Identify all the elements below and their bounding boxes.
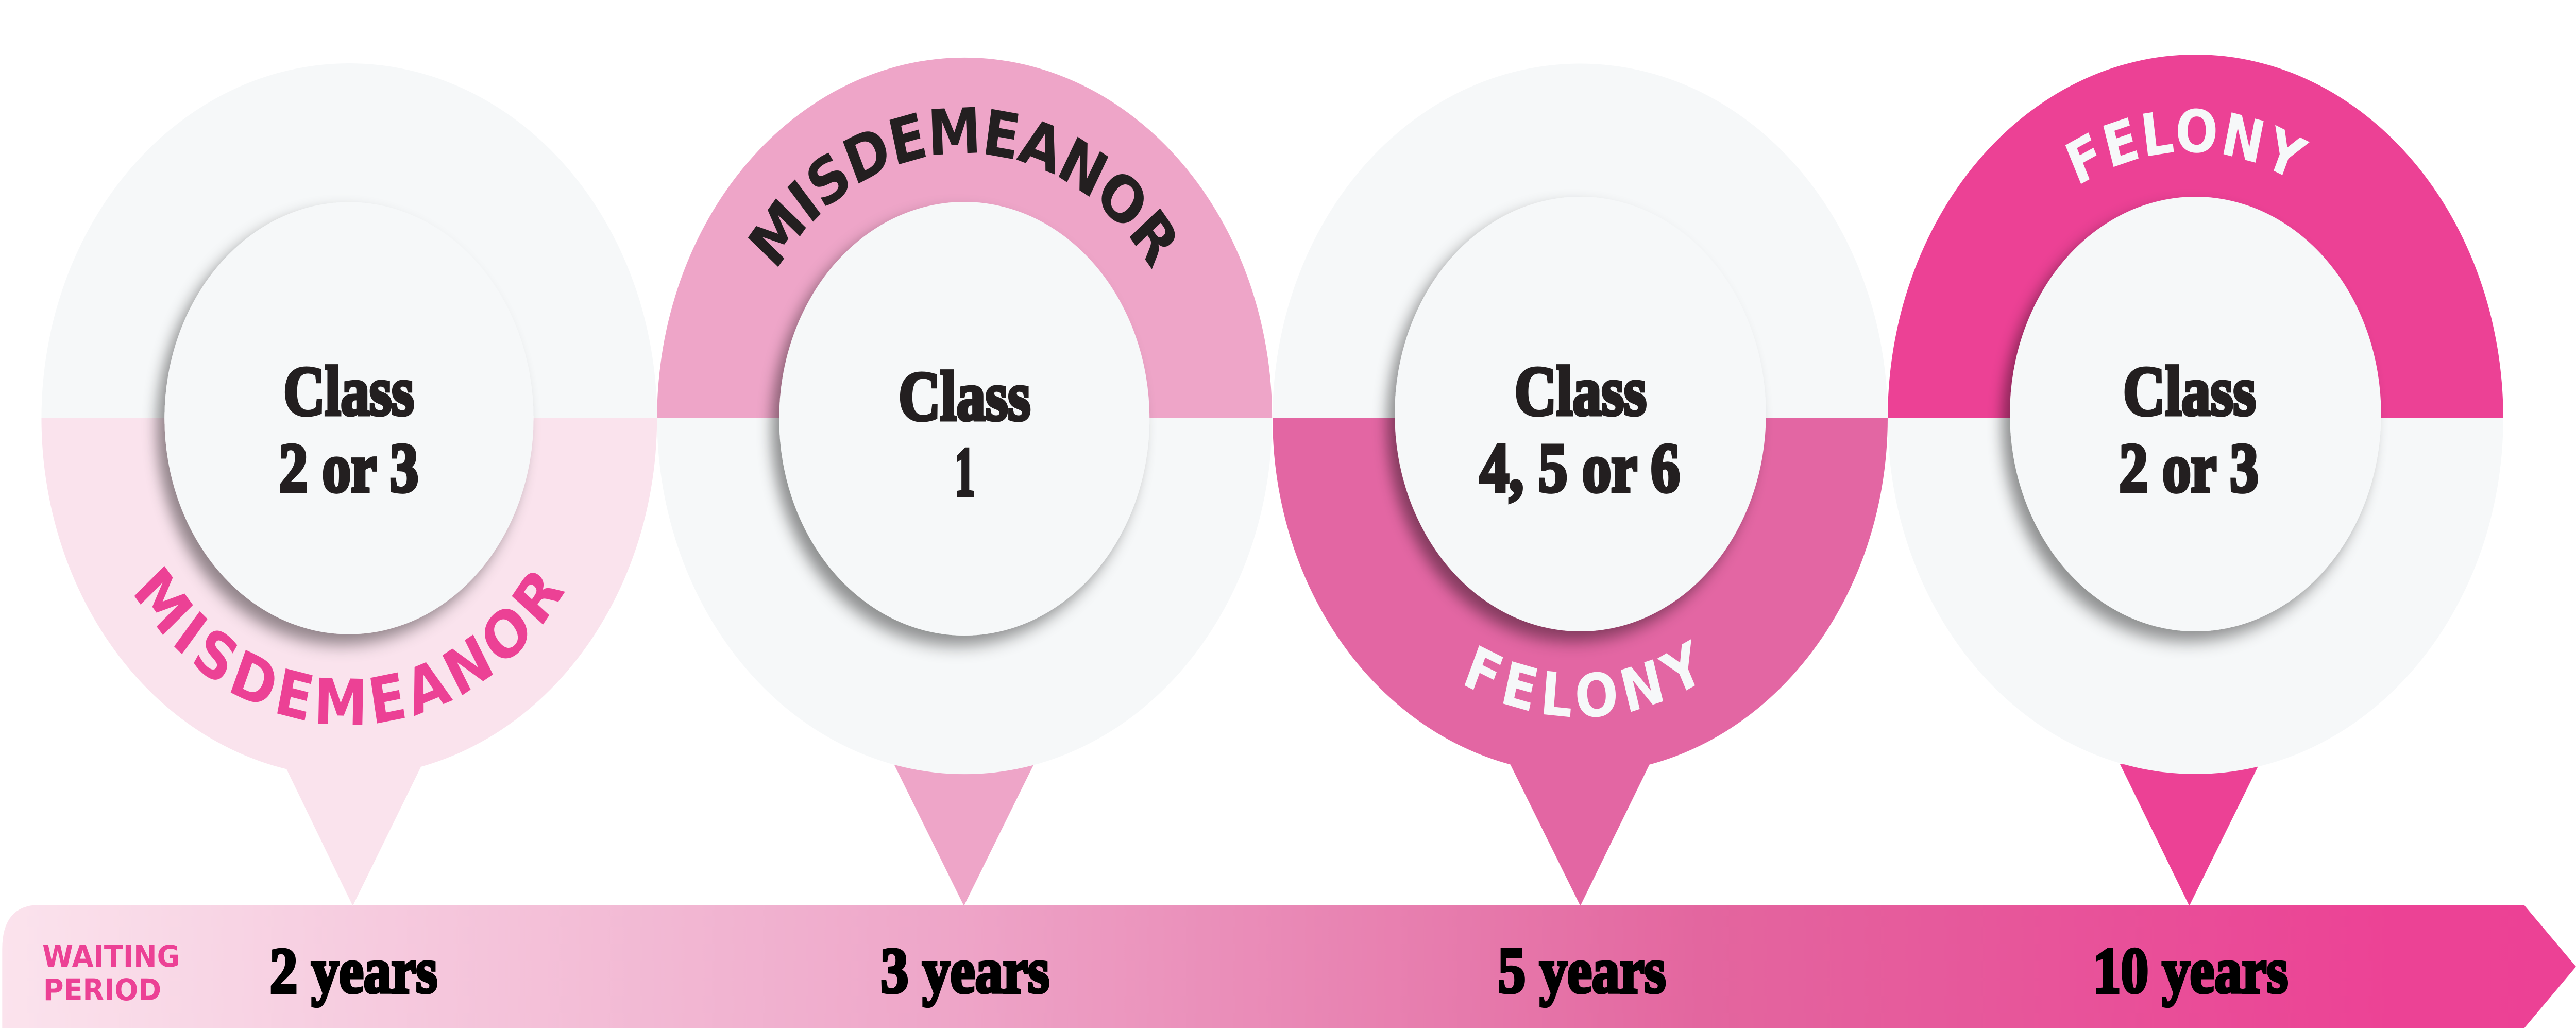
label: waiting period: PERIOD	[43, 972, 161, 1007]
inner circle	[1395, 197, 1766, 631]
class text: 2 or 3	[2119, 430, 2259, 507]
class text: Class	[1515, 353, 1647, 430]
class text	[899, 358, 1030, 511]
panel: class 2 or 3 misdemeanor, 2 years	[41, 63, 657, 1008]
curved label: misdemeanor: MISDEMEANOR	[134, 566, 565, 725]
panel: class 1 misdemeanor, 3 years	[657, 58, 1273, 1008]
class text: Class	[283, 353, 414, 430]
ring: upper and lower halves	[41, 63, 657, 777]
timeline arrow bar	[2, 905, 2576, 1028]
panel: class 4, 5 or 6 felony, 5 years	[1273, 64, 1888, 1008]
inner circle	[2010, 197, 2381, 631]
ring: upper and lower halves	[657, 58, 1272, 774]
curved label: felony: FELONY	[1464, 639, 1695, 717]
pointer: misdemeanor 2 years	[286, 757, 421, 906]
inner circle	[779, 202, 1149, 636]
class text: Class	[2123, 353, 2256, 430]
pointer: felony 10 years	[2120, 764, 2258, 906]
pointer: misdemeanor 3 years	[894, 765, 1033, 906]
ring: upper and lower halves	[1273, 64, 1888, 774]
duration: 10 years: 10 years	[2093, 935, 2288, 1007]
pointer: felony 5 years	[1510, 757, 1650, 906]
label: waiting period	[42, 939, 180, 1007]
class text	[2119, 353, 2259, 507]
duration: 5 years: 5 years	[1498, 935, 1666, 1007]
panel: class 2 or 3 felony, 10 years	[1888, 55, 2503, 1008]
label: waiting period: WAITING	[42, 939, 180, 974]
ring: upper and lower halves	[1888, 55, 2503, 774]
class text: Class	[899, 358, 1030, 435]
curved label: misdemeanor: MISDEMEANOR	[748, 107, 1175, 269]
class text	[1480, 353, 1680, 507]
duration: 3 years: 3 years	[880, 935, 1049, 1007]
curved label: felony: FELONY	[2065, 108, 2310, 184]
duration: 2 years: 2 years	[270, 935, 437, 1007]
class text: 1	[955, 434, 975, 511]
class text: 2 or 3	[279, 430, 418, 507]
class text	[279, 353, 418, 507]
inner circle	[164, 202, 534, 634]
class text: 4, 5 or 6	[1480, 430, 1680, 507]
